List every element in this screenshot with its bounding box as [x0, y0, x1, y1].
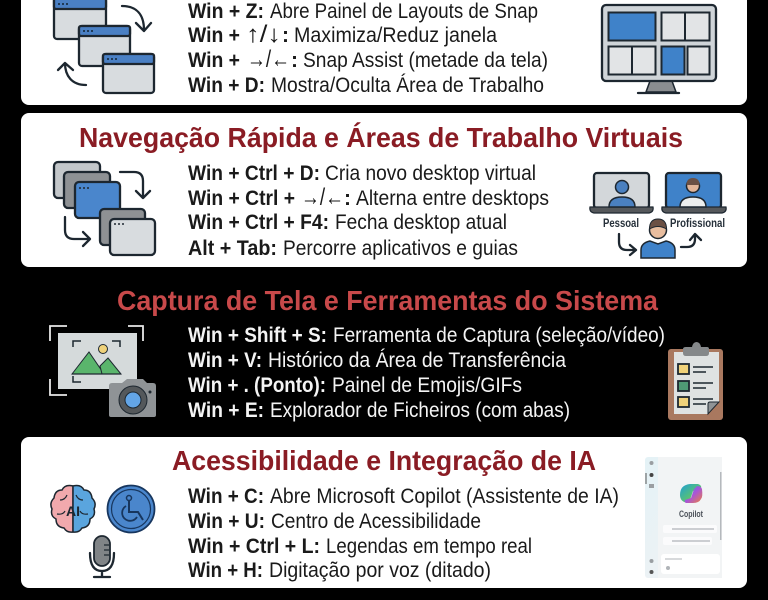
text: snap shortcuts: Maximiza/Reduz janela: [294, 24, 497, 47]
text: capture shortcuts: Ferramenta de Captura (seleção/vídeo): [333, 324, 665, 347]
text: snap shortcuts: Mostra/Oculta Área de Trabalho: [271, 74, 544, 97]
text: navigation shortcuts: Fecha desktop atual: [335, 211, 507, 234]
panel: screenshot and system tools: [50, 285, 723, 422]
text: navigation shortcuts: →/←: [301, 184, 344, 211]
text: AI and accessibility shortcuts: Win + U:: [188, 510, 265, 533]
text: capture shortcuts: Win + V:: [188, 349, 262, 372]
text: snap shortcuts: Win + D:: [188, 74, 265, 97]
text: snap shortcuts: Abre Painel de Layouts de Snap: [270, 0, 538, 23]
text: snap shortcuts: :: [282, 24, 289, 47]
icon: monitor with snap layout: [602, 5, 716, 93]
label: Profissional: Profissional: [670, 218, 725, 230]
text: snap shortcuts: :: [291, 49, 298, 72]
icon: stacked windows with arrows: [54, 0, 154, 93]
text: capture shortcuts: Painel de Emojis/GIFs: [332, 374, 522, 397]
heading: capture: Captura de Tela e Ferramentas do Sistema: [117, 285, 658, 316]
icon: AI brain: [51, 486, 95, 532]
text: AI and accessibility shortcuts: Digitação por voz (ditado): [269, 559, 491, 582]
text: capture shortcuts: Histórico da Área de Transferência: [268, 349, 566, 372]
text: navigation shortcuts: [188, 162, 549, 260]
panel: accessibility and AI: [21, 437, 747, 588]
text: capture shortcuts: Win + E:: [188, 399, 264, 422]
panel: quick navigation and virtual desktops: [21, 113, 747, 267]
icon: clipboard checklist: [668, 342, 723, 420]
text: capture shortcuts: Explorador de Ficheiros (com abas): [270, 399, 570, 422]
text: AI and accessibility shortcuts: Win + Ctrl + L:: [188, 535, 320, 558]
text: navigation shortcuts: Cria novo desktop virtual: [325, 162, 536, 185]
text: AI and accessibility shortcuts: [188, 485, 619, 582]
icon: virtual desktops stack: [54, 162, 155, 255]
text: capture shortcuts: Win + . (Ponto):: [188, 374, 326, 397]
text: AI and accessibility shortcuts: Centro de Acessibilidade: [271, 510, 481, 533]
text: snap shortcuts: [188, 0, 548, 97]
label: Pessoal: Pessoal: [603, 218, 639, 230]
icon: Copilot window: [645, 457, 722, 578]
text: snap shortcuts: Win +: [188, 24, 240, 47]
label: Copilot: Copilot: [679, 509, 703, 519]
heading: accessibility: Acessibilidade e Integração de IA: [172, 445, 596, 476]
text: snap shortcuts: Snap Assist (metade da tela): [303, 49, 548, 72]
icon: AI brain: AI: [66, 503, 80, 519]
text: navigation shortcuts: Win + Ctrl + F4:: [188, 211, 329, 234]
icon: accessibility wheelchair: [108, 486, 154, 532]
text: navigation shortcuts: Win + Ctrl + D:: [188, 162, 320, 185]
text: snap shortcuts: Win +: [188, 49, 240, 72]
text: navigation shortcuts: Alterna entre desktops: [356, 187, 549, 210]
icon: microphone: [90, 536, 114, 577]
heading: navigation: Navegação Rápida e Áreas de Trabalho Virtuais: [79, 122, 683, 153]
text: navigation shortcuts: Win + Ctrl +: [188, 187, 295, 210]
panel: snap layouts: [21, 0, 747, 105]
text: navigation shortcuts: :: [344, 187, 351, 210]
text: capture shortcuts: Win + Shift + S:: [188, 324, 327, 347]
text: AI and accessibility shortcuts: Abre Microsoft Copilot (Assistente de IA): [270, 485, 619, 508]
icon: screenshot frame with camera: [50, 326, 156, 417]
text: capture shortcuts: [188, 324, 665, 422]
text: AI and accessibility shortcuts: Legendas em tempo real: [326, 535, 532, 558]
text: AI and accessibility shortcuts: Win + H:: [188, 559, 263, 582]
icon: personal and professional laptops: [590, 173, 726, 258]
text: navigation shortcuts: Percorre aplicativos e guias: [283, 237, 518, 260]
text: AI and accessibility shortcuts: Win + C:: [188, 485, 264, 508]
text: snap shortcuts: Win + Z:: [188, 0, 264, 23]
text: navigation shortcuts: Alt + Tab:: [188, 237, 277, 260]
text: snap shortcuts: →/←: [247, 46, 290, 73]
text: snap shortcuts: ↑/↓: [246, 21, 281, 48]
